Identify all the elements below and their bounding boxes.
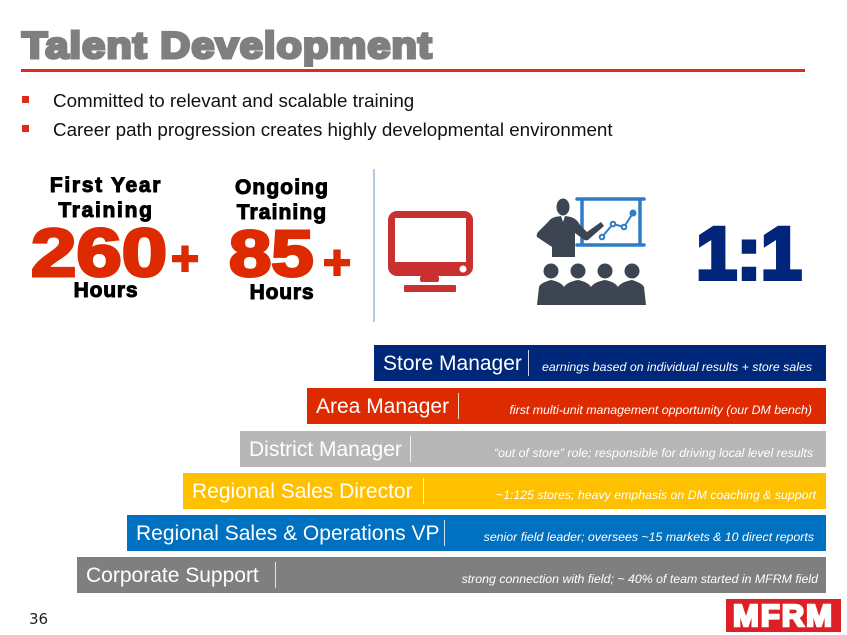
bar: store manager: earnings based on individual results + store sales [542, 360, 812, 374]
title: Talent Development [22, 25, 433, 66]
label [50, 174, 162, 222]
bar: area manager [307, 388, 826, 424]
number: 85 [229, 217, 314, 290]
bar: area manager: Area Manager [316, 395, 449, 418]
bar: regional sales and operations vp [127, 515, 826, 551]
vertical divider [373, 169, 375, 322]
bar: regional sales and operations vp: senior field leader; oversees ~15 markets & 10 direct reports [484, 530, 814, 544]
bar: regional sales director [183, 473, 826, 509]
label: Ongoing [235, 176, 329, 199]
unit: Hours [250, 281, 314, 304]
plus: + [323, 237, 351, 290]
bar: store manager [374, 345, 826, 381]
title underline [21, 69, 805, 72]
label [235, 176, 329, 224]
bullet list [22, 90, 613, 140]
page number: 36 [29, 610, 48, 628]
career ladder [77, 345, 826, 593]
unit: Hours [74, 279, 138, 302]
logo: MFRM: MFRM [733, 598, 834, 633]
label: Training [237, 201, 327, 224]
bar: regional sales director: Regional Sales Director [192, 480, 413, 503]
bar: district manager: “out of store” role; responsible for driving local level results [494, 446, 813, 460]
icon: computer monitor [388, 211, 473, 292]
number: 260 [31, 215, 167, 291]
stat: 1:1 ratio: 1:1 [696, 212, 801, 295]
label: Training [58, 199, 154, 222]
plus: + [171, 233, 199, 286]
stat: ongoing training [229, 176, 351, 304]
bar: corporate support: strong connection with field; ~ 40% of team started in MFRM field [462, 572, 818, 586]
bar: regional sales director: ~1:125 stores; heavy emphasis on DM coaching & support [496, 488, 816, 502]
label: First Year [50, 174, 162, 197]
icon: presenter with audience and chart [536, 197, 646, 305]
stat: first year training [31, 174, 199, 302]
bar: district manager [240, 431, 826, 467]
bar: corporate support [77, 557, 826, 593]
bullet 1: Committed to relevant and scalable training [53, 90, 414, 111]
bar: area manager: first multi-unit management opportunity (our DM bench) [509, 403, 812, 417]
bar: corporate support: Corporate Support [86, 564, 259, 587]
bullet 2: Career path progression creates highly developmental environment [53, 119, 613, 140]
bar: regional sales and operations vp: Regional Sales & Operations VP [136, 522, 440, 545]
bar: store manager: Store Manager [383, 352, 522, 375]
bar: district manager: District Manager [249, 438, 402, 461]
